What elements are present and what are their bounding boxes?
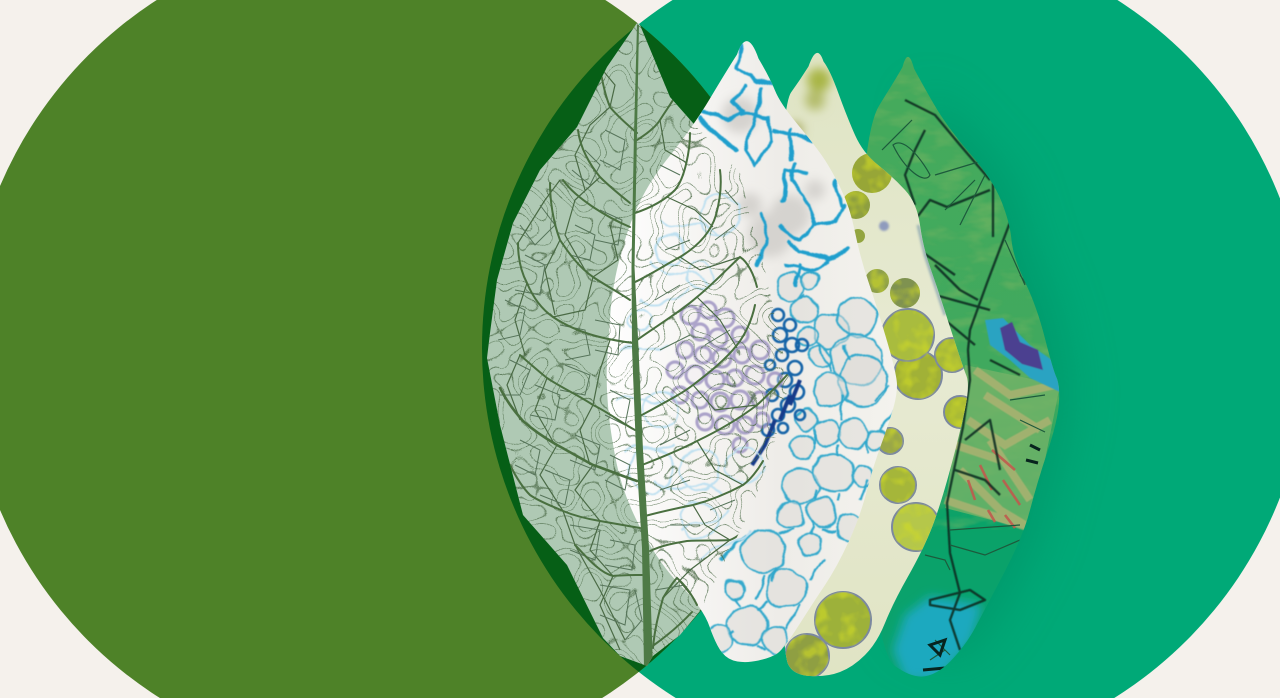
leaf: pale skeleton blade <box>487 23 790 666</box>
dark blue dense cell cluster <box>762 309 808 436</box>
leaf: pale cell layer with algae spheres <box>784 52 968 676</box>
grey shaded areas <box>722 97 825 257</box>
tertiary vein mesh <box>480 20 800 670</box>
algae spheres <box>785 153 976 678</box>
purple and blue stains <box>985 318 1060 392</box>
dark stain <box>752 380 800 465</box>
soft leaf shadow <box>900 90 1070 660</box>
green base <box>866 56 1060 664</box>
right circle <box>482 0 1280 698</box>
pale base <box>784 52 968 676</box>
dark cracks <box>905 100 1020 650</box>
skeleton vein network <box>480 20 800 670</box>
purple stained tissue <box>667 302 782 452</box>
midrib <box>632 25 653 668</box>
violet spot <box>879 221 889 231</box>
left circle <box>0 0 795 698</box>
leaf: blue stained cell layer <box>600 30 900 670</box>
upper hyphae strands <box>700 45 848 285</box>
tan stripe zone <box>945 370 1055 528</box>
large cell walls <box>708 271 888 653</box>
red stain marks <box>968 450 1020 528</box>
looping tertiary veins <box>507 67 757 650</box>
dark spots <box>923 445 1040 670</box>
cell wall connections <box>720 295 893 650</box>
cell base <box>600 30 900 670</box>
stained midsection <box>945 365 1060 530</box>
mottled texture <box>869 57 1060 530</box>
cyan stain <box>985 318 1060 392</box>
additional polygonal mesh <box>498 130 738 640</box>
circle overlap <box>482 24 710 672</box>
purple stain <box>1000 322 1043 370</box>
moss patches near tip <box>787 68 831 138</box>
secondary veins <box>500 67 787 648</box>
sphere speckle <box>786 154 967 676</box>
leaf: green stained layer <box>866 56 1060 677</box>
blue edge shadow on outer margin <box>918 225 945 315</box>
cyan stain lower <box>893 596 982 680</box>
pale blue tissue outlines <box>615 195 763 560</box>
fine dark scribbles <box>882 120 1045 660</box>
